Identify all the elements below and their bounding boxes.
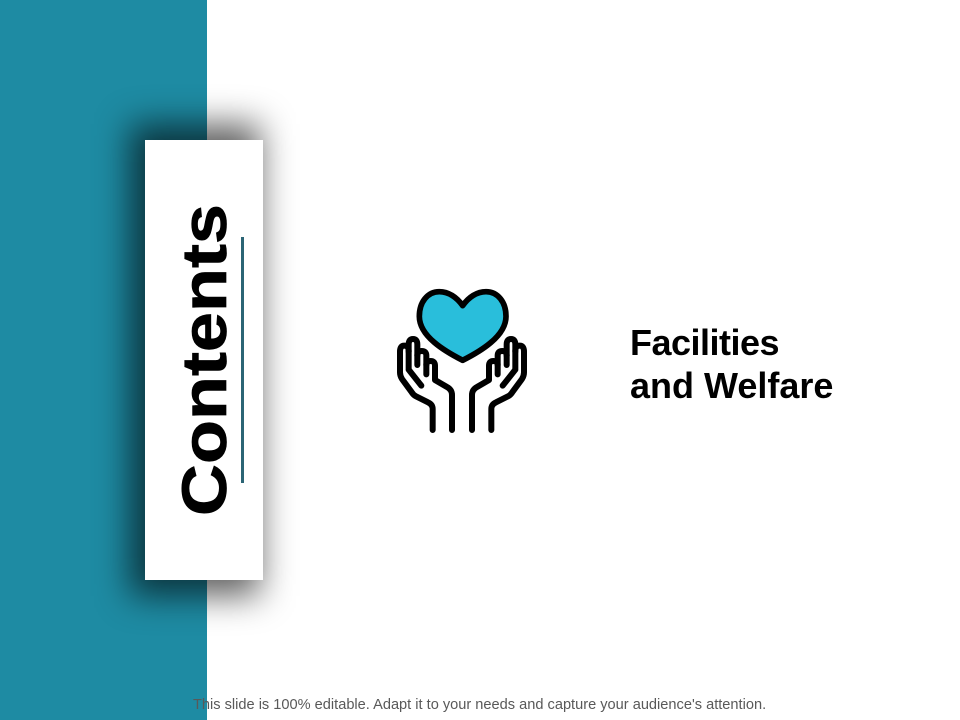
teal side band (0, 0, 207, 720)
panel: contents card (145, 140, 263, 580)
footer note: This slide is 100% editable. Adapt it to your needs and capture your audience's attention. (193, 697, 766, 713)
left hand (400, 339, 452, 430)
heading underline (241, 237, 244, 483)
heart (419, 292, 506, 360)
text block: Facilities and Welfare: Facilities (630, 322, 779, 363)
card shadow (130, 124, 260, 596)
icon: heart held by two hands (397, 288, 527, 433)
heading: Contents: Contents (170, 204, 240, 516)
text block: Facilities and Welfare: and Welfare (630, 365, 833, 406)
text block: Facilities and Welfare (630, 322, 833, 406)
right hand (472, 339, 524, 430)
